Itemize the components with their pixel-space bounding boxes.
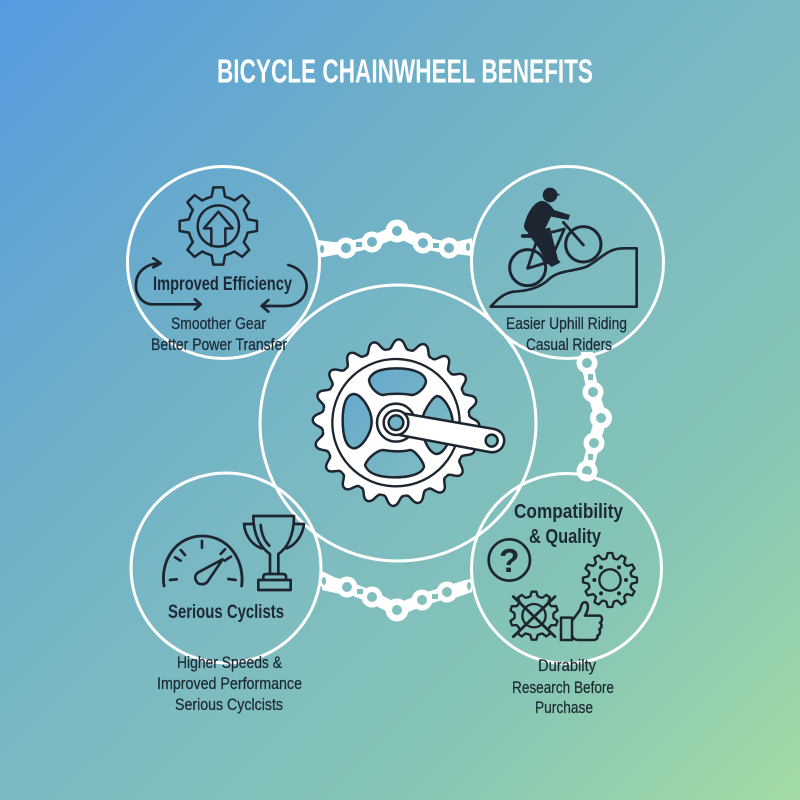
text: casual riders: Casual Riders: [526, 336, 612, 354]
title: BICYCLE CHAINWHEEL BENEFITS: [217, 52, 593, 90]
icon: gear: [583, 553, 637, 607]
icon: circular arrows: [136, 258, 307, 312]
text: durabilty: Durabilty: [538, 657, 597, 675]
icon: speedometer: [163, 536, 242, 586]
icon: chainwheel with crank arm: [310, 336, 504, 509]
heading: and quality: & Quality: [529, 526, 602, 548]
heading: compatibility: Compatibility: [514, 501, 624, 523]
icon: question mark: ?: [499, 543, 520, 580]
panel: improved efficiency: [128, 166, 320, 358]
panel: compatibility and quality: [472, 474, 662, 717]
panel: serious cyclists: [131, 473, 321, 714]
panel: easier uphill riding: [472, 166, 664, 358]
text: serious cyclcists: Serious Cyclcists: [175, 696, 283, 714]
text: research before: Research Before: [512, 679, 614, 697]
icon: thumbs up: [561, 602, 602, 640]
panel: central chainwheel: [260, 285, 536, 561]
icon: trophy: [244, 516, 304, 590]
icon: cyclist on hill: [491, 188, 637, 307]
text: smoother gear: Smoother Gear: [171, 315, 266, 333]
text: easier uphill riding: Easier Uphill Riding: [506, 315, 627, 333]
icon: question mark: [489, 539, 530, 581]
heading: improved efficiency: Improved Efficiency: [153, 274, 292, 295]
text: better power transfer: Better Power Transfer: [151, 336, 287, 354]
text: purchase: Purchase: [535, 699, 593, 717]
chain: right link between uphill and compatibility circles: [576, 352, 612, 482]
chain: top link between efficiency and uphill circles: [318, 220, 472, 258]
chain: bottom link between serious cyclists and compatibility circles: [322, 571, 472, 622]
heading: serious cyclists: Serious Cyclists: [168, 602, 284, 623]
icon: crossed-out gear: [509, 592, 559, 640]
icon: gear with up arrow: [180, 187, 257, 265]
text: improved performance: Improved Performance: [157, 675, 302, 693]
text: higher speeds: Higher Speeds &: [177, 654, 282, 672]
